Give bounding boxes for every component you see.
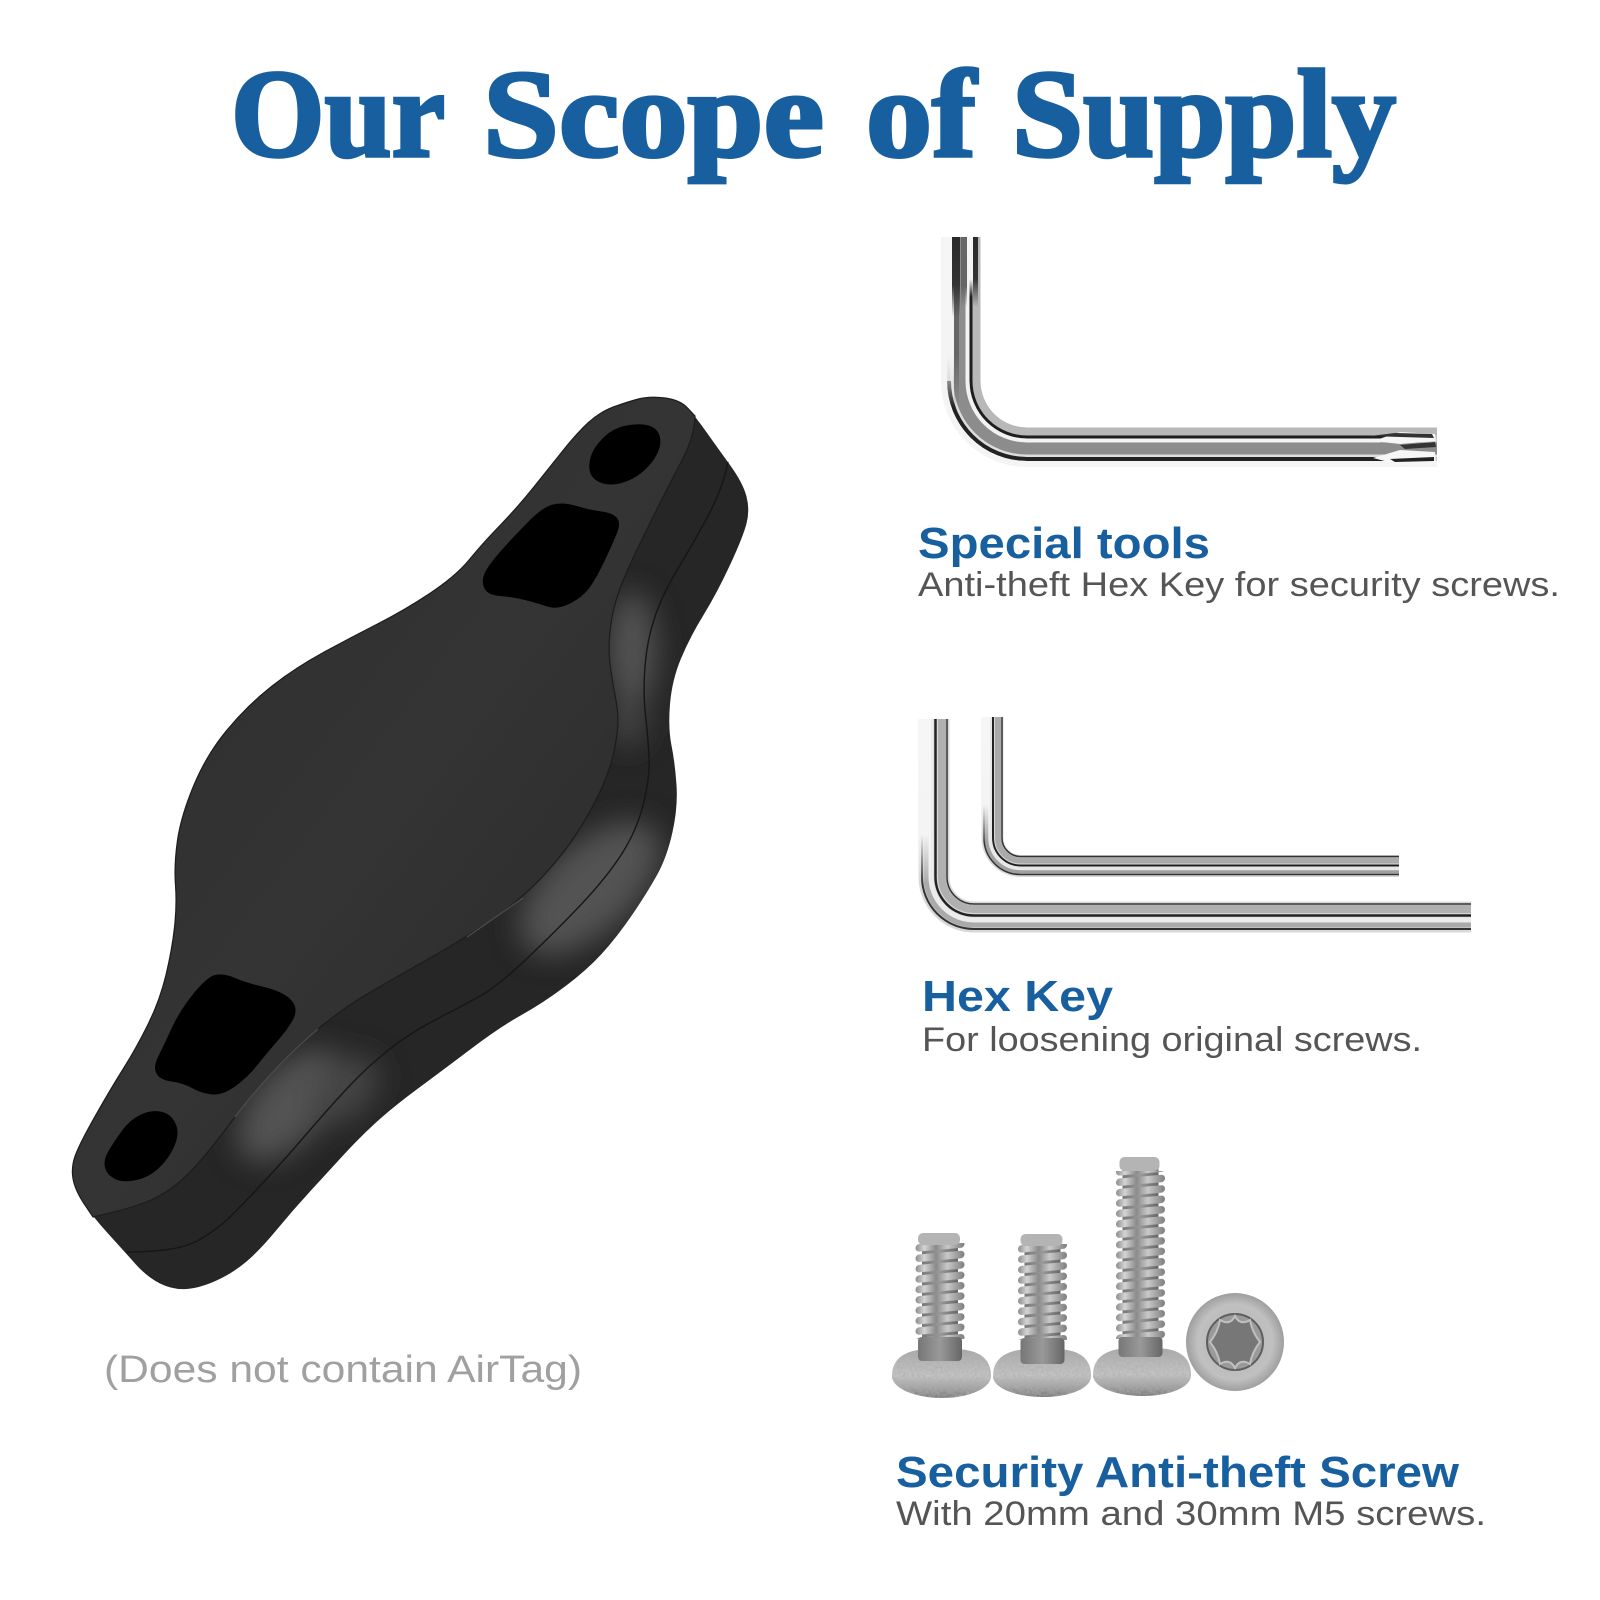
key shaft vertical shading [943,237,954,407]
title: Supply [1012,46,1396,184]
title: of [866,46,977,184]
torx tip right [1370,432,1436,465]
heading: security screw: Security Anti-theft Screw [896,1448,1460,1497]
heading: special tools: Special tools [918,519,1210,568]
bottom shaped hole [155,974,296,1095]
top shaped hole [483,504,619,608]
top face edge highlights [235,898,523,1117]
title: Our [231,46,445,184]
bottom oval hole [104,1111,178,1181]
torx tip top [952,237,978,317]
seam line [127,462,728,1252]
side wall highlights [218,592,683,1180]
heading: hex key: Hex Key [922,972,1114,1021]
top oval hole [589,424,660,484]
title: Scope [483,46,824,184]
long hex key [918,719,1471,929]
description: special tools: Anti-theft Hex Key for security screws. [918,566,1560,604]
long screw [1093,1157,1191,1396]
description: security screw: With 20mm and 30mm M5 screws. [896,1495,1486,1533]
icon: security screws [892,1157,1284,1398]
icon: two hex L-keys [918,717,1471,929]
screw head with torx recess [1186,1293,1284,1391]
short hex key [981,717,1399,874]
short screw 1 [892,1233,991,1398]
icon: torx L-key [943,237,1437,465]
holder top face [72,397,695,1217]
short screw 2 [993,1234,1091,1397]
description: hex key: For loosening original screws. [922,1021,1422,1059]
caption: AirTag not included: (Does not contain AirTag) [104,1349,582,1391]
holder side wall [72,397,748,1289]
product: black AirTag holder [72,397,748,1289]
title [231,46,1396,184]
